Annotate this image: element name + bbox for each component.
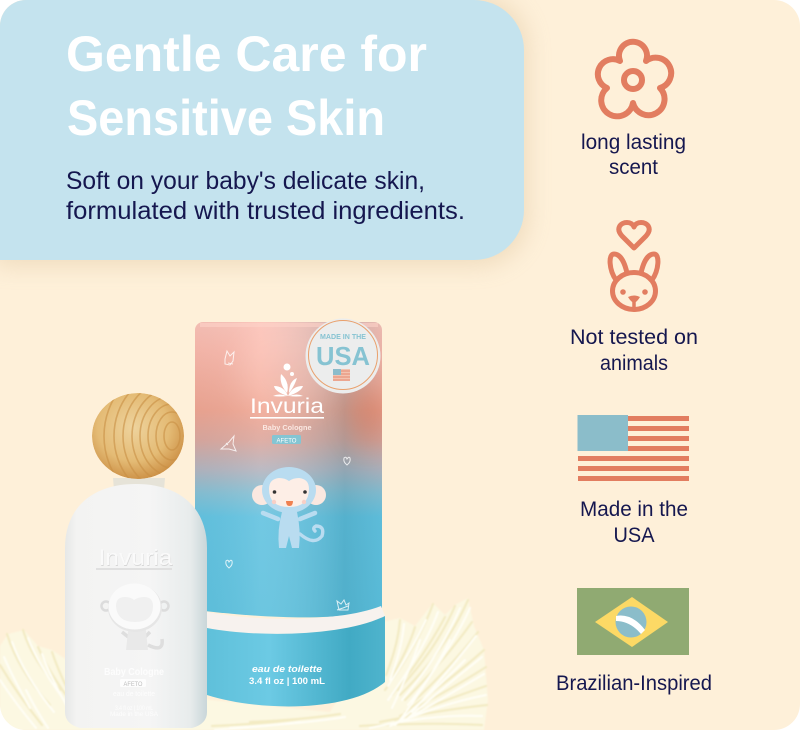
- brand logo: Baby Cologne: [262, 425, 312, 432]
- label: long lasting: [581, 131, 686, 154]
- bottle label text: Made in the USA: [110, 712, 158, 718]
- monkey illustration: [252, 467, 326, 548]
- brand logo: Invuria: [250, 394, 324, 418]
- lid text: 3.4 fl oz | 100 mL: [249, 676, 325, 687]
- wooden cap: [92, 393, 184, 479]
- label: [570, 326, 698, 375]
- white band between box and lid: [207, 606, 385, 634]
- subtitle: Soft on your baby's delicate skin,: [66, 167, 425, 195]
- feature: not tested on animals: [570, 222, 698, 375]
- brand logo: [250, 364, 324, 444]
- bottle body: [65, 484, 207, 728]
- icon: brazil flag: [577, 588, 689, 655]
- label: scent: [609, 156, 658, 179]
- label: USA: [614, 524, 654, 547]
- box lid: [207, 616, 385, 706]
- feature: brazilian-inspired: [556, 588, 712, 695]
- header panel: [0, 0, 528, 266]
- bottle label text: AFETO: [124, 682, 143, 688]
- label: Not tested on: [570, 326, 698, 349]
- label: [580, 498, 688, 547]
- bottle neck: [113, 478, 165, 490]
- bottle embossed logo: Invuria: [98, 545, 173, 570]
- label: Brazilian-Inspired: [556, 672, 712, 695]
- bottle label text: eau de toilette: [113, 691, 155, 698]
- title: Gentle Care for: [66, 26, 427, 82]
- bottle label text: [104, 667, 164, 718]
- subtitle: formulated with trusted ingredients.: [66, 197, 465, 225]
- fur rug: [0, 598, 488, 730]
- title: Sensitive Skin: [67, 90, 385, 146]
- box doodles: [221, 351, 350, 610]
- cologne box: [195, 318, 386, 706]
- label: Made in the: [580, 498, 688, 521]
- bottle embossed monkey: [102, 584, 168, 650]
- icon: usa flag: [578, 415, 689, 481]
- bottle label text: 3.4 fl oz | 100 mL: [115, 706, 154, 712]
- made in the usa sticker: USA: [316, 341, 370, 371]
- made in the usa sticker: [306, 318, 380, 394]
- bottle label text: Baby Cologne: [104, 667, 164, 678]
- brand logo: AFETO: [276, 438, 297, 444]
- bottle embossed logo: Invuria: [99, 546, 174, 571]
- lid text: [249, 664, 325, 687]
- subtitle: [66, 167, 465, 225]
- label: [581, 131, 686, 179]
- feature: made in the usa: [578, 415, 689, 547]
- made in the usa sticker: MADE IN THE: [320, 334, 366, 341]
- icon: heart and bunny: [610, 222, 658, 310]
- lid text: eau de toilette: [252, 664, 323, 675]
- feature: long lasting scent: [581, 42, 686, 179]
- title: [66, 26, 427, 146]
- label: animals: [600, 352, 668, 375]
- cologne bottle: [65, 393, 207, 728]
- icon: flower: [598, 42, 671, 116]
- box upper body: [195, 322, 386, 617]
